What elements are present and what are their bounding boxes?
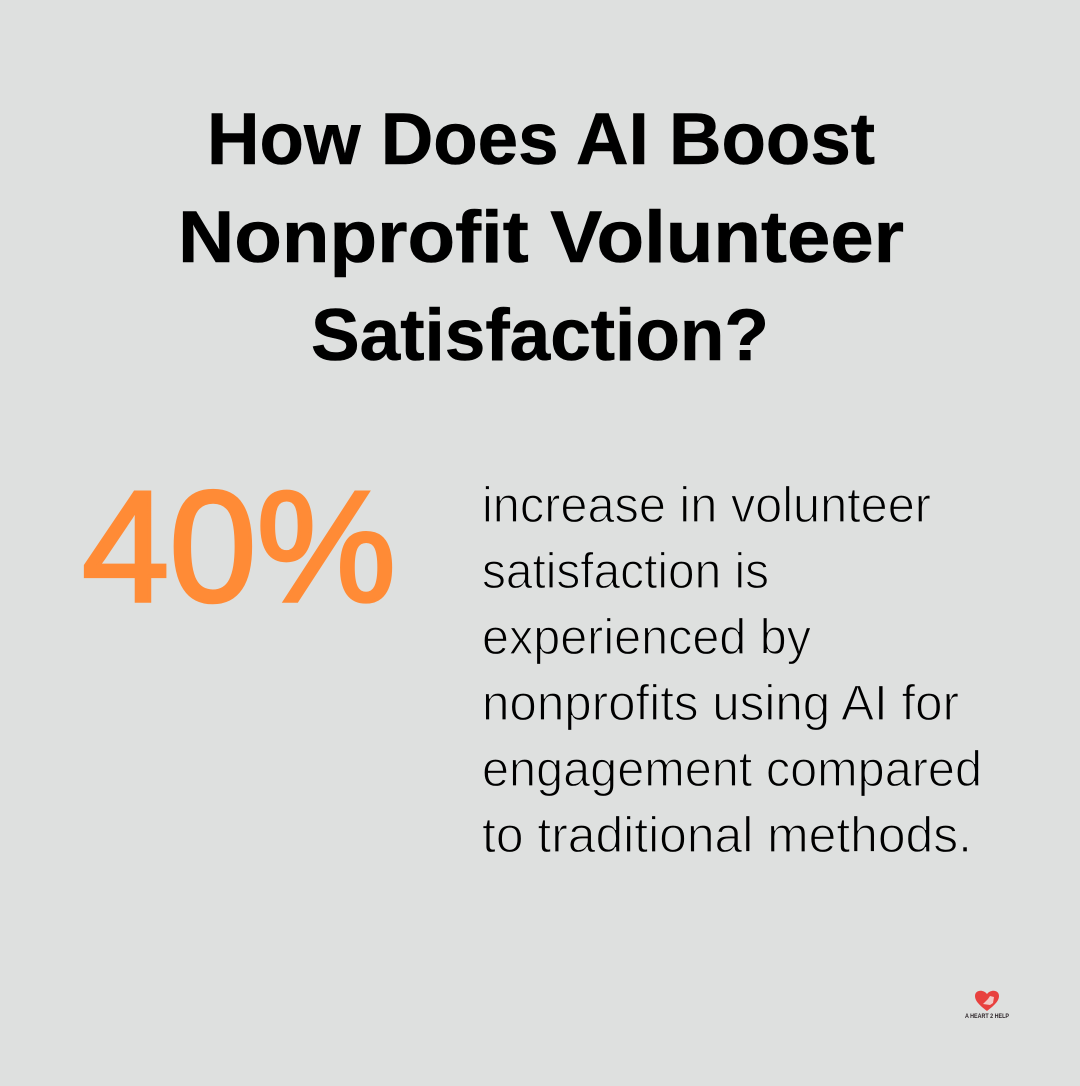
description text: increase in volunteer [482, 477, 931, 533]
logo wordmark: A HEART 2 HELP [965, 1013, 1010, 1020]
description text [482, 477, 982, 863]
title [178, 99, 904, 376]
big statistic: 40%: 40% [82, 459, 396, 635]
description text: engagement compared [482, 741, 982, 797]
description text: satisfaction is [482, 543, 769, 599]
logo: A Heart 2 Help [965, 991, 1010, 1020]
icon: heart [975, 991, 999, 1011]
title: Nonprofit Volunteer [178, 197, 904, 278]
description text: to traditional methods. [482, 807, 972, 863]
icon: hands in heart [983, 996, 994, 1005]
title: How Does AI Boost [207, 99, 875, 180]
description text: nonprofits using AI for [482, 675, 959, 731]
description text: experienced by [482, 609, 811, 665]
title: Satisfaction? [311, 295, 769, 376]
